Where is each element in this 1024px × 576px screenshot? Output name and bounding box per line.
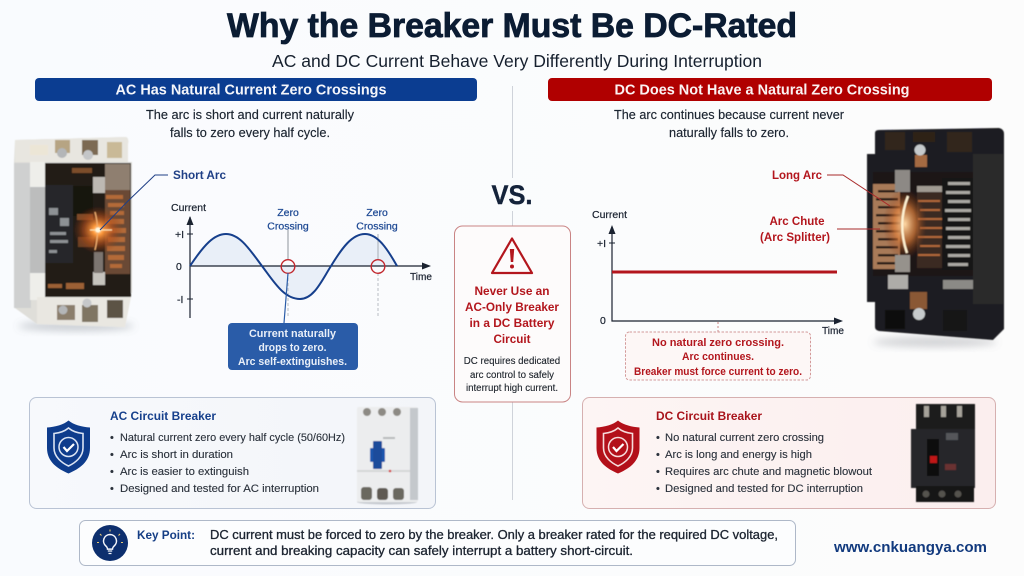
warning panel: arc control to safely: [470, 370, 554, 381]
panel: AC circuit breaker: •: [110, 466, 114, 478]
panel: AC circuit breaker: Designed and tested for AC interruption: [120, 483, 319, 495]
AC heading bar: [35, 78, 477, 101]
panel: DC circuit breaker: •: [656, 432, 660, 444]
illustration: opened AC breaker with short arc: [14, 137, 134, 331]
DC current chart: 0: [600, 315, 606, 327]
subtitle: AC and DC Current Behave Very Differently During Interruption: [272, 51, 762, 71]
callout: current drops to zero: [228, 273, 358, 370]
panel: DC circuit breaker: No natural current zero crossing: [665, 432, 824, 444]
panel: AC circuit breaker: •: [110, 483, 114, 495]
panel: AC circuit breaker: Arc is short in duration: [120, 449, 233, 461]
panel: AC circuit breaker: •: [110, 449, 114, 461]
label: arc chute: Arc Chute: [770, 216, 824, 228]
icon: AC shield: [47, 420, 90, 474]
panel: DC circuit breaker: [582, 398, 996, 508]
AC current chart: Time: [410, 271, 432, 283]
label: long arc: Long Arc: [772, 170, 823, 182]
key point box: Key Point:: [137, 528, 195, 542]
icon: DC shield: [596, 420, 640, 474]
callout: no natural zero crossing: No natural zero crossing.: [652, 337, 784, 349]
DC heading bar: DC Does Not Have a Natural Zero Crossing: [614, 82, 910, 98]
AC current chart: +I: [175, 229, 184, 241]
key point box: [80, 520, 796, 566]
label: arc chute: (Arc Splitter): [760, 232, 830, 244]
warning panel: DC requires dedicated: [464, 356, 560, 367]
panel: AC circuit breaker: Arc is easier to extinguish: [120, 466, 249, 478]
icon: light bulb: [92, 525, 128, 561]
label: long arc: [772, 170, 890, 206]
DC intro text: [614, 108, 844, 140]
illustration: opened DC breaker with long arc: [867, 128, 1004, 347]
warning panel: Never Use an: [474, 284, 550, 298]
key point box: DC current must be forced to zero by the breaker. Only a breaker rated for the required DC voltage,: [210, 528, 778, 542]
DC current chart: +I: [597, 238, 606, 250]
callout: no natural zero crossing: [626, 332, 810, 380]
center divider: [512, 86, 514, 500]
panel: DC circuit breaker: DC Circuit Breaker: [656, 411, 763, 423]
label: short arc: [100, 170, 227, 230]
label: arc chute: [760, 216, 880, 244]
VS label: VS.: [492, 180, 532, 210]
panel: DC circuit breaker: •: [656, 483, 660, 495]
panel: AC circuit breaker: •: [110, 432, 114, 444]
warning panel: in a DC Battery: [470, 316, 555, 330]
illustration: black DC breaker: [911, 404, 975, 502]
DC heading bar: [548, 78, 992, 101]
warning panel: AC-Only Breaker: [465, 300, 559, 314]
AC current chart: -I: [177, 294, 183, 306]
callout: current drops to zero: Current naturally: [249, 328, 337, 340]
DC current chart: Current: [592, 210, 627, 221]
illustration: white AC breaker: [357, 407, 418, 504]
key point box: current and breaking capacity can safely interrupt a battery short-circuit.: [210, 544, 633, 558]
AC current chart: Zero: [366, 207, 388, 219]
AC current chart: Crossing: [267, 220, 309, 232]
panel: DC circuit breaker: Requires arc chute and magnetic blowout: [665, 466, 872, 478]
panel: AC circuit breaker: Natural current zero every half cycle (50/60Hz): [120, 432, 345, 444]
DC intro text: The arc continues because current never: [614, 108, 844, 122]
AC current chart: Crossing: [356, 220, 398, 232]
AC intro text: [146, 108, 355, 140]
panel: AC circuit breaker: [30, 398, 436, 508]
DC current chart: [592, 210, 844, 337]
warning panel: interrupt high current.: [466, 383, 558, 394]
icon: warning triangle: [492, 238, 532, 273]
AC current chart: 0: [176, 261, 182, 273]
warning panel: [454, 226, 570, 402]
panel: DC circuit breaker: Designed and tested for DC interruption: [665, 483, 863, 495]
panel: DC circuit breaker: •: [656, 466, 660, 478]
website url: www.cnkuangya.com: [833, 539, 987, 556]
warning panel: Circuit: [494, 332, 530, 346]
callout: current drops to zero: drops to zero.: [258, 342, 326, 354]
AC intro text: The arc is short and current naturally: [146, 108, 355, 122]
AC intro text: falls to zero every half cycle.: [170, 126, 330, 140]
DC intro text: naturally falls to zero.: [669, 126, 789, 140]
AC current chart: Zero: [277, 207, 299, 219]
panel: DC circuit breaker: •: [656, 449, 660, 461]
callout: no natural zero crossing: Breaker must force current to zero.: [634, 366, 802, 378]
AC heading bar: AC Has Natural Current Zero Crossings: [116, 82, 386, 98]
DC current chart: Time: [822, 325, 844, 337]
label: short arc: Short Arc: [173, 170, 227, 182]
callout: no natural zero crossing: Arc continues.: [682, 351, 754, 363]
AC current chart: [171, 203, 432, 318]
title: Why the Breaker Must Be DC-Rated: [227, 7, 797, 45]
panel: DC circuit breaker: Arc is long and energy is high: [665, 449, 812, 461]
AC current chart: Current: [171, 203, 206, 214]
panel: AC circuit breaker: AC Circuit Breaker: [110, 411, 217, 423]
callout: current drops to zero: Arc self-extinguishes.: [238, 356, 347, 368]
